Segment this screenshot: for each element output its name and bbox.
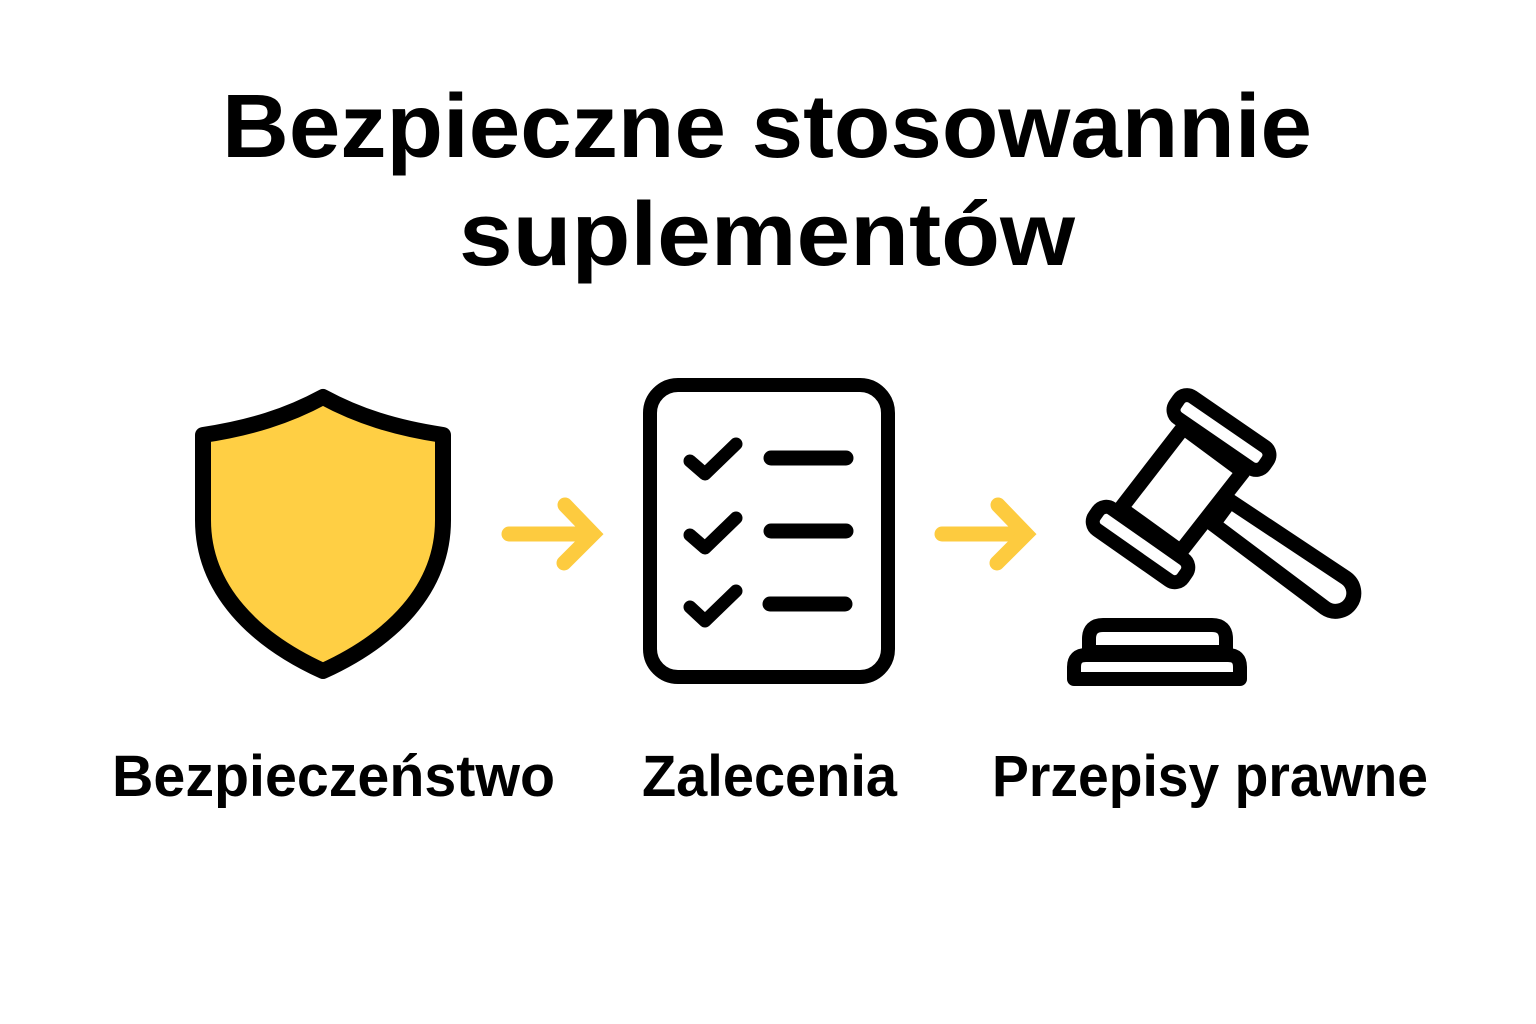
arrow: shield to checklist bbox=[509, 505, 593, 563]
title: Bezpieczne stosowannie bbox=[222, 77, 1312, 177]
gavel handle bbox=[1213, 501, 1354, 611]
label: recommendations: Zalecenia bbox=[642, 744, 898, 809]
gavel head bottom bar bbox=[1089, 503, 1192, 586]
title: suplementów bbox=[459, 185, 1076, 285]
check items bbox=[690, 444, 736, 621]
gavel head centre bbox=[1121, 427, 1243, 552]
list lines bbox=[770, 458, 846, 604]
label: legal regulations: Przepisy prawne bbox=[992, 744, 1428, 809]
label: safety: Bezpieczeństwo bbox=[112, 744, 555, 809]
sound block bbox=[1074, 625, 1240, 679]
gavel head top bar bbox=[1170, 391, 1273, 474]
icon: checklist bbox=[650, 385, 888, 677]
icon: gavel bbox=[1074, 391, 1354, 679]
icon: shield bbox=[203, 397, 443, 671]
document outline bbox=[650, 385, 888, 677]
title bbox=[222, 77, 1312, 285]
arrow: checklist to gavel bbox=[942, 505, 1026, 563]
